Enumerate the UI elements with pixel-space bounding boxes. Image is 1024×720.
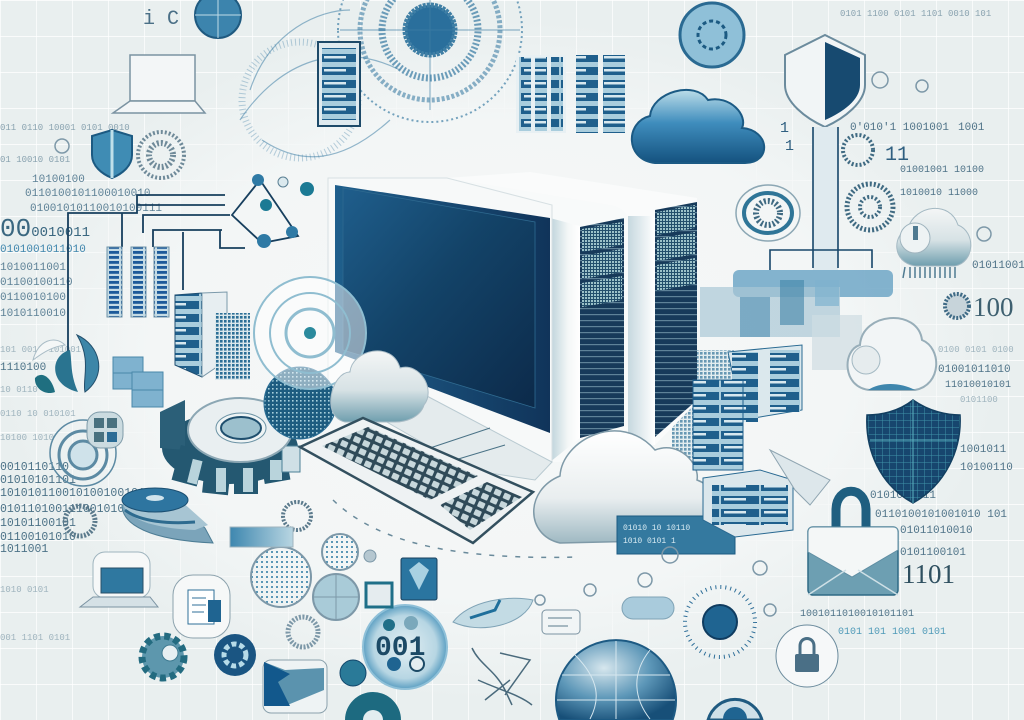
lower server [703, 450, 830, 537]
binary text lower left [0, 461, 152, 643]
shield connectors [770, 127, 872, 270]
binary text left: 01100100110 [0, 277, 73, 289]
badge tile [401, 558, 437, 600]
binary text left: 01001010110010100111 [30, 203, 162, 215]
monitor side [447, 178, 628, 462]
padlock badge [776, 625, 838, 687]
binary text top right strip: 0101 1100 0101 1101 0010 101 [840, 9, 991, 19]
binary text left: 0110010100 [0, 292, 66, 304]
network nodes [252, 174, 314, 248]
laptop bottom left [80, 552, 158, 607]
right server stacks [693, 345, 802, 470]
gear [160, 398, 300, 495]
binary text lower left: 01010101101 [0, 474, 76, 487]
bottom envelope [263, 660, 327, 713]
binary text top left: 011 0110 10001 0101 0010 [0, 123, 130, 133]
concentric ring left bottom [50, 420, 116, 486]
hologram rings [254, 277, 366, 439]
binary text right: 1001011 [960, 444, 1007, 456]
binary text lower left: 0010110110 [0, 461, 69, 474]
bottom gear [345, 692, 401, 720]
lock tile left [87, 412, 123, 448]
binary text right: 11010010101 [945, 380, 1011, 391]
binary text right: 0101001011 [870, 490, 936, 502]
server box left [175, 292, 250, 380]
binary text right: 0101100101 [900, 547, 966, 559]
cog bottom left [142, 636, 184, 678]
binary text left: 10100 1010 [0, 433, 54, 443]
binary text lower left: 1010101100101001001010 [0, 487, 152, 500]
binary text lower left: 1011001 [0, 543, 48, 556]
binary text right: 0101 101 1001 0101 [838, 627, 946, 638]
binary text left: 1110100 [0, 362, 46, 374]
cloud right [897, 208, 971, 278]
binary text right [800, 122, 1024, 638]
binary text lower left: 0101101001110010101 [0, 503, 131, 516]
binary text left: 0110100101100010010 [25, 188, 150, 200]
lens orbs [251, 502, 376, 647]
dark circle icon [214, 634, 256, 676]
digits right: 11 [885, 144, 909, 167]
binary text left: 0101001011010 [0, 244, 86, 256]
binary text lower left: 01100101010 [0, 531, 76, 544]
code panel [617, 516, 735, 554]
pale cloud right [848, 318, 936, 390]
circuit sketch bottom [472, 648, 532, 705]
monitor frame [328, 178, 552, 462]
binary text lower left: 001 1101 0101 [0, 633, 70, 643]
circular arrows icon left [33, 335, 99, 393]
digits right: 1 [780, 120, 789, 137]
disk stack [122, 488, 213, 543]
monitor tower back [447, 172, 697, 445]
radial node [685, 587, 755, 657]
tag [542, 610, 580, 634]
right grille [655, 202, 697, 437]
binary text left [0, 174, 162, 443]
binary text lower left: 1010 0101 [0, 585, 49, 595]
binary text right: 0'010'1 1001001 [850, 122, 949, 134]
top right orb [680, 3, 744, 67]
binary text lower left: 10101100101 [0, 517, 76, 530]
binary text left: 10100100 [32, 174, 85, 186]
digits right [780, 120, 909, 167]
binary text top left [0, 123, 130, 165]
100 text [945, 292, 1014, 322]
small square icons [230, 527, 392, 686]
dotted arc [333, 500, 580, 557]
keyboard [300, 418, 533, 543]
digits right: 1 [785, 138, 794, 155]
binary text right: 0110100101001010 101 [875, 509, 1007, 521]
server rack group left [107, 247, 169, 317]
bottom globe [556, 640, 676, 720]
code panel: 1010 0101 1 [623, 537, 676, 546]
small cloud mid [331, 351, 428, 422]
monitor stand [385, 395, 552, 480]
binary text right: 01011001 [972, 260, 1024, 272]
rings right [736, 135, 893, 241]
left gauge [138, 132, 184, 178]
small ring bottom left [65, 506, 95, 536]
bottom arch icon [708, 699, 762, 720]
binary text right: 1001011010010101101 [800, 609, 914, 620]
pill icon [622, 597, 674, 619]
binary text right: 0100 0101 0100 [938, 345, 1014, 355]
001 disc: 001 [375, 633, 425, 664]
001 disc [363, 605, 447, 689]
binary text left: 0110 10 010101 [0, 409, 76, 419]
server hologram dots by tower [672, 350, 734, 458]
binary text right: 10100110 [960, 462, 1013, 474]
left shield small [92, 130, 132, 178]
big concentric circle top centre [240, 0, 522, 158]
network lines [68, 180, 298, 372]
lock and envelope [808, 491, 898, 595]
front cloud [534, 431, 717, 543]
binary text right: 01011010010 [900, 525, 973, 537]
server racks top [516, 55, 625, 133]
binary text right: 01001001 10100 [900, 165, 984, 176]
translucent blocks [700, 270, 893, 370]
right shield [867, 400, 960, 503]
binary text left: 1010110010 [0, 308, 66, 320]
binary text left: 1010011001 [0, 262, 66, 274]
scattered dots [55, 72, 991, 616]
binary text right: 01001011010 [938, 364, 1011, 376]
letters top left: i C [143, 8, 179, 31]
shield top [785, 35, 865, 127]
binary text right: 1010010 11000 [900, 188, 978, 199]
laptop top left [113, 55, 205, 113]
binary text top left: 01 10010 0101 [0, 155, 70, 165]
leaf [453, 598, 533, 628]
binary text left: 000010011 [0, 214, 90, 244]
blue cloud top [632, 90, 764, 163]
document badge [173, 575, 230, 638]
binary text left: 10 0110 [0, 385, 38, 395]
binary text right: 1001 [958, 122, 985, 134]
code panel: 01010 10 10110 [623, 524, 690, 533]
1101 text: 1101 [902, 559, 955, 589]
small server top centre [318, 42, 360, 126]
binary text left: 101 0010 101001 [0, 345, 81, 355]
top orb [195, 0, 241, 38]
blue boxes cluster [113, 357, 163, 407]
binary text right: 0101100 [960, 395, 998, 405]
100 text: 100 [973, 292, 1014, 322]
